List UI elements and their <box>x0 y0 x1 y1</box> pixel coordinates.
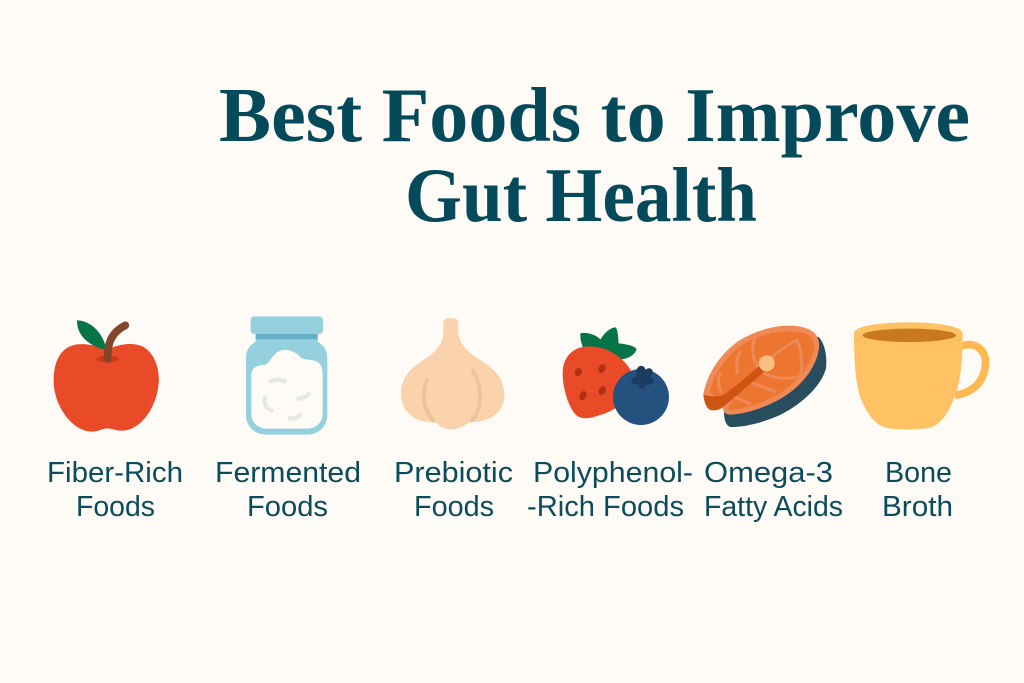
icon: strawberry and blueberry <box>563 327 669 425</box>
label: Omega-3 Fatty Acids <box>704 457 843 523</box>
icon: garlic <box>401 318 504 429</box>
icon: fermented jar <box>246 316 327 435</box>
label: Fermented Foods: Foods <box>247 491 328 523</box>
label: Polyphenol-Rich Foods: Polyphenol- <box>533 457 693 489</box>
label: Fiber-Rich Foods: Fiber-Rich <box>47 457 183 489</box>
title: Gut Health <box>405 152 757 238</box>
icon: apple <box>54 320 159 432</box>
label: Omega-3 Fatty Acids: Fatty Acids <box>704 491 843 523</box>
icon: bone broth mug <box>854 322 986 429</box>
label: Polyphenol-Rich Foods: -Rich Foods <box>527 491 684 523</box>
label: Prebiotic Foods: Prebiotic <box>394 457 513 489</box>
title <box>219 72 970 238</box>
icon: salmon steak <box>703 326 826 427</box>
label: Prebiotic Foods: Foods <box>414 491 494 523</box>
label: Polyphenol-Rich Foods <box>527 457 693 523</box>
label: Prebiotic Foods <box>394 457 513 523</box>
label: Omega-3 Fatty Acids: Omega-3 <box>704 457 833 489</box>
title: Best Foods to Improve <box>219 72 970 158</box>
label: Fiber-Rich Foods: Foods <box>76 491 155 523</box>
label: Bone Broth: Broth <box>882 491 953 523</box>
label: Fiber-Rich Foods <box>47 457 183 523</box>
label: Bone Broth: Bone <box>885 457 952 489</box>
label: Fermented Foods: Fermented <box>215 457 361 489</box>
label: Bone Broth <box>882 457 953 523</box>
label: Fermented Foods <box>215 457 361 523</box>
